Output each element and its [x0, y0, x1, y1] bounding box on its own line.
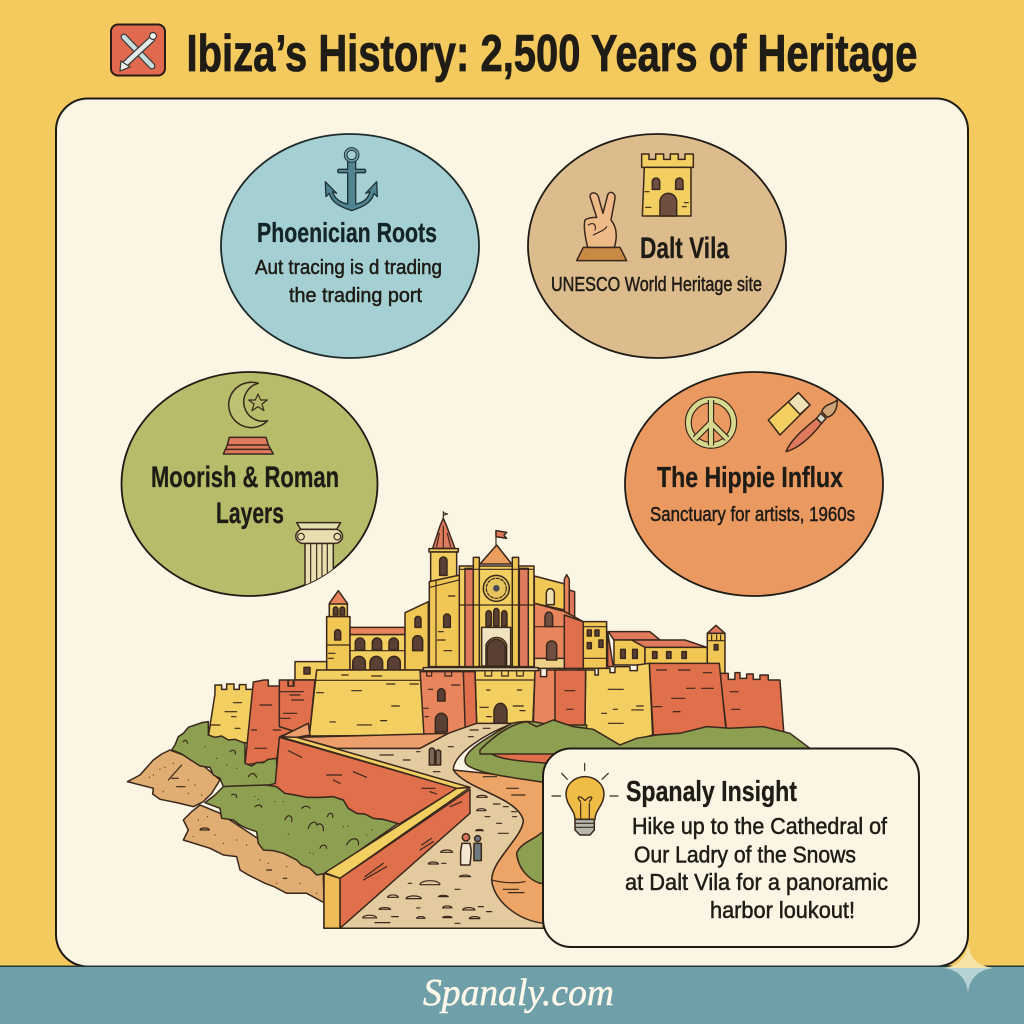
callout body: harbor loukout! [710, 897, 855, 923]
icon: tower [642, 154, 693, 216]
icon: stone base [223, 437, 273, 454]
icon: paint block and brush [768, 393, 837, 452]
icon: crossed pencil badge [111, 24, 165, 76]
cobblestones [363, 795, 487, 919]
panel: Phoenician Roots [221, 134, 479, 358]
heading: Moorish & Roman [151, 461, 339, 494]
wall bricks [280, 670, 740, 725]
left annex [295, 662, 327, 680]
main bastion red middle [533, 670, 586, 730]
main bastion yellow gate [475, 671, 535, 727]
upper buildings [295, 512, 725, 680]
callout body [625, 813, 888, 923]
small bush [517, 833, 553, 883]
people [429, 748, 481, 865]
description: the trading port [289, 284, 422, 307]
description: Sanctuary for artists, 1960s [650, 503, 855, 526]
cathedral right wing [534, 575, 583, 668]
icon: ionic column [295, 522, 344, 585]
callout: Spanaly Insight [543, 748, 919, 947]
main panel [56, 98, 968, 966]
left outer walls [208, 680, 315, 765]
icon: crescent and star [229, 382, 268, 428]
icon: anchor [325, 149, 377, 211]
yellow main bastion [309, 670, 424, 736]
arcaded gallery [350, 627, 405, 670]
icon: sparkle [944, 944, 993, 992]
description [255, 256, 442, 307]
icon: light bulb [552, 763, 618, 835]
callout body: Our Ladry of the Snows [634, 842, 856, 868]
cathedral left facade [429, 575, 460, 667]
cathedral bell tower [429, 512, 458, 582]
footer brand text: Spanaly.com [423, 972, 614, 1014]
main bastion red [649, 663, 726, 735]
main bastion red gate [420, 672, 477, 736]
right shrubs [480, 720, 810, 754]
heading [151, 461, 339, 530]
left nave wing [405, 602, 428, 670]
callout body: at Dalt Vila for a panoramic [625, 869, 888, 895]
icon: peace hand [577, 192, 627, 261]
footer band [0, 966, 1024, 1024]
rocky ground [127, 750, 220, 807]
panel: Moorish and Roman Layers [122, 372, 378, 597]
cathedral central facade [459, 531, 534, 667]
left bell tower [327, 591, 350, 670]
heading: Phoenician Roots [257, 217, 437, 248]
heading: Dalt Vila [640, 232, 729, 265]
illustration: Dalt Vila citadel [208, 512, 784, 765]
fortress bastions [279, 663, 784, 745]
cobbled road [324, 723, 543, 928]
yellow left tower [208, 684, 253, 743]
heading: The Hippie Influx [657, 462, 843, 494]
callout body: Hike up to the Cathedral of [632, 813, 888, 839]
upper shrubs [172, 722, 277, 787]
left red wall [279, 680, 315, 736]
description: Aut tracing is d trading [255, 256, 442, 279]
green mound with red garden [465, 722, 587, 783]
main bastion yellow right [585, 663, 653, 745]
callout heading: Spanaly Insight [626, 776, 797, 808]
ledge with crenellations [423, 668, 538, 671]
panel: Dalt Vila [528, 134, 786, 358]
red left tower [245, 680, 315, 765]
right buildings [583, 622, 725, 673]
right red wall [720, 673, 784, 735]
icon: peace symbol [688, 400, 734, 445]
illustration: hillside and path [127, 722, 587, 928]
description: UNESCO World Heritage site [551, 274, 762, 296]
orange ground [453, 770, 550, 928]
title [111, 24, 918, 83]
red retaining wall [268, 723, 470, 928]
heading: Layers [216, 497, 284, 530]
panel: The Hippie Influx [625, 372, 883, 596]
lower shrubs [205, 785, 398, 875]
